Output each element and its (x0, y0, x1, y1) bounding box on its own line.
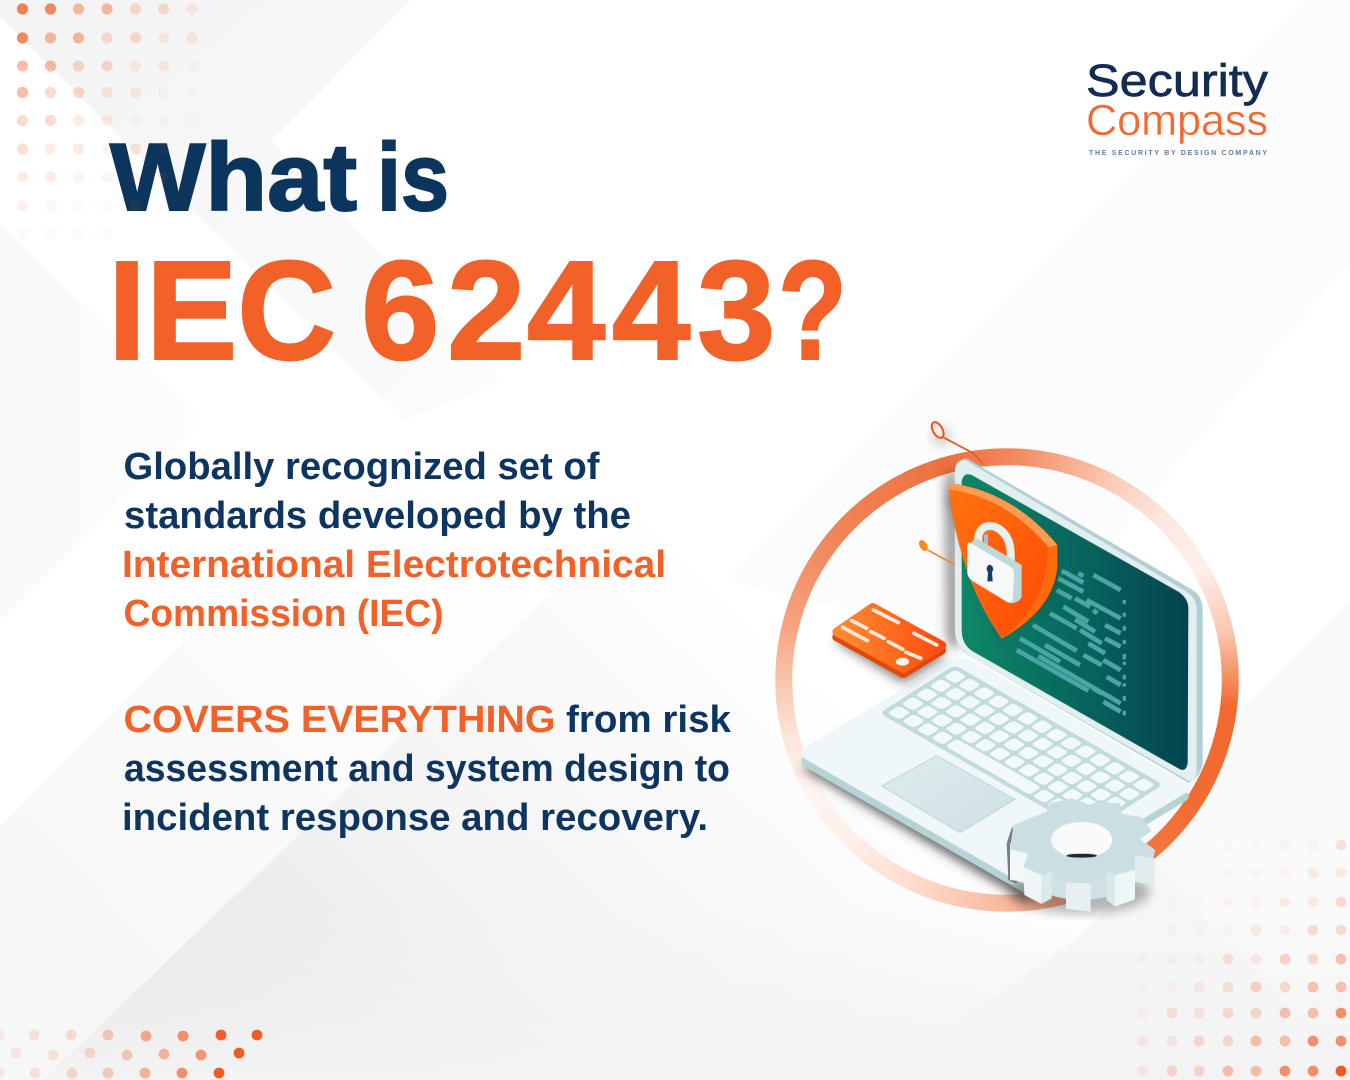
paragraph 2 (122, 699, 732, 839)
gear (1007, 798, 1155, 913)
logo word: Compass: Compass (1086, 96, 1268, 145)
code lines on screen (1017, 571, 1121, 712)
paragraph 2: COVERS EVERYTHING (124, 699, 556, 741)
decorative dots: bottom left (0, 1030, 262, 1078)
logo word: Security: Security (1086, 55, 1269, 106)
paragraph 1: standards developed by the (124, 495, 631, 537)
title line: IEC 62443?: ? (778, 231, 847, 389)
padlock (967, 526, 1022, 603)
title line: IEC 62443? (108, 231, 847, 389)
ring (775, 448, 1239, 912)
paragraph 1 (122, 446, 666, 635)
title line: What is: is (377, 124, 449, 231)
shadows: laptop (802, 467, 1043, 902)
laptop base (801, 658, 1189, 894)
card (835, 607, 947, 683)
title line: IEC 62443?: 62443 (361, 231, 775, 389)
paragraph 2: incident response and recovery. (122, 797, 708, 839)
title line: What is: What (110, 124, 357, 231)
shield with padlock (945, 484, 1057, 640)
pin: small orange (917, 539, 954, 564)
logo tagline: THE SECURITY BY DESIGN COMPANY (1089, 150, 1267, 157)
paragraph 1: Commission (IEC) (124, 593, 444, 635)
paragraph 2: assessment and system design to (124, 748, 730, 790)
laptop lid (955, 458, 1203, 783)
paragraph 1: International Electrotechnical (122, 544, 666, 586)
trackpad (882, 756, 1015, 833)
paragraph 2: from risk (566, 699, 732, 741)
keyboard (880, 665, 1163, 833)
title line: IEC 62443?: IEC (108, 231, 336, 389)
text block: description (122, 446, 732, 839)
pin: top ring (929, 420, 983, 463)
title line: What is (110, 124, 449, 231)
logo: Security Compass (1086, 55, 1269, 157)
paragraph 1: Globally recognized set of (124, 446, 600, 488)
illustration: secure laptop in ring (775, 421, 1239, 920)
decorative dots: top left (16, 3, 198, 240)
laptop, shield, card and gear artwork (798, 421, 1203, 920)
title: What is IEC 62443? (108, 124, 847, 389)
